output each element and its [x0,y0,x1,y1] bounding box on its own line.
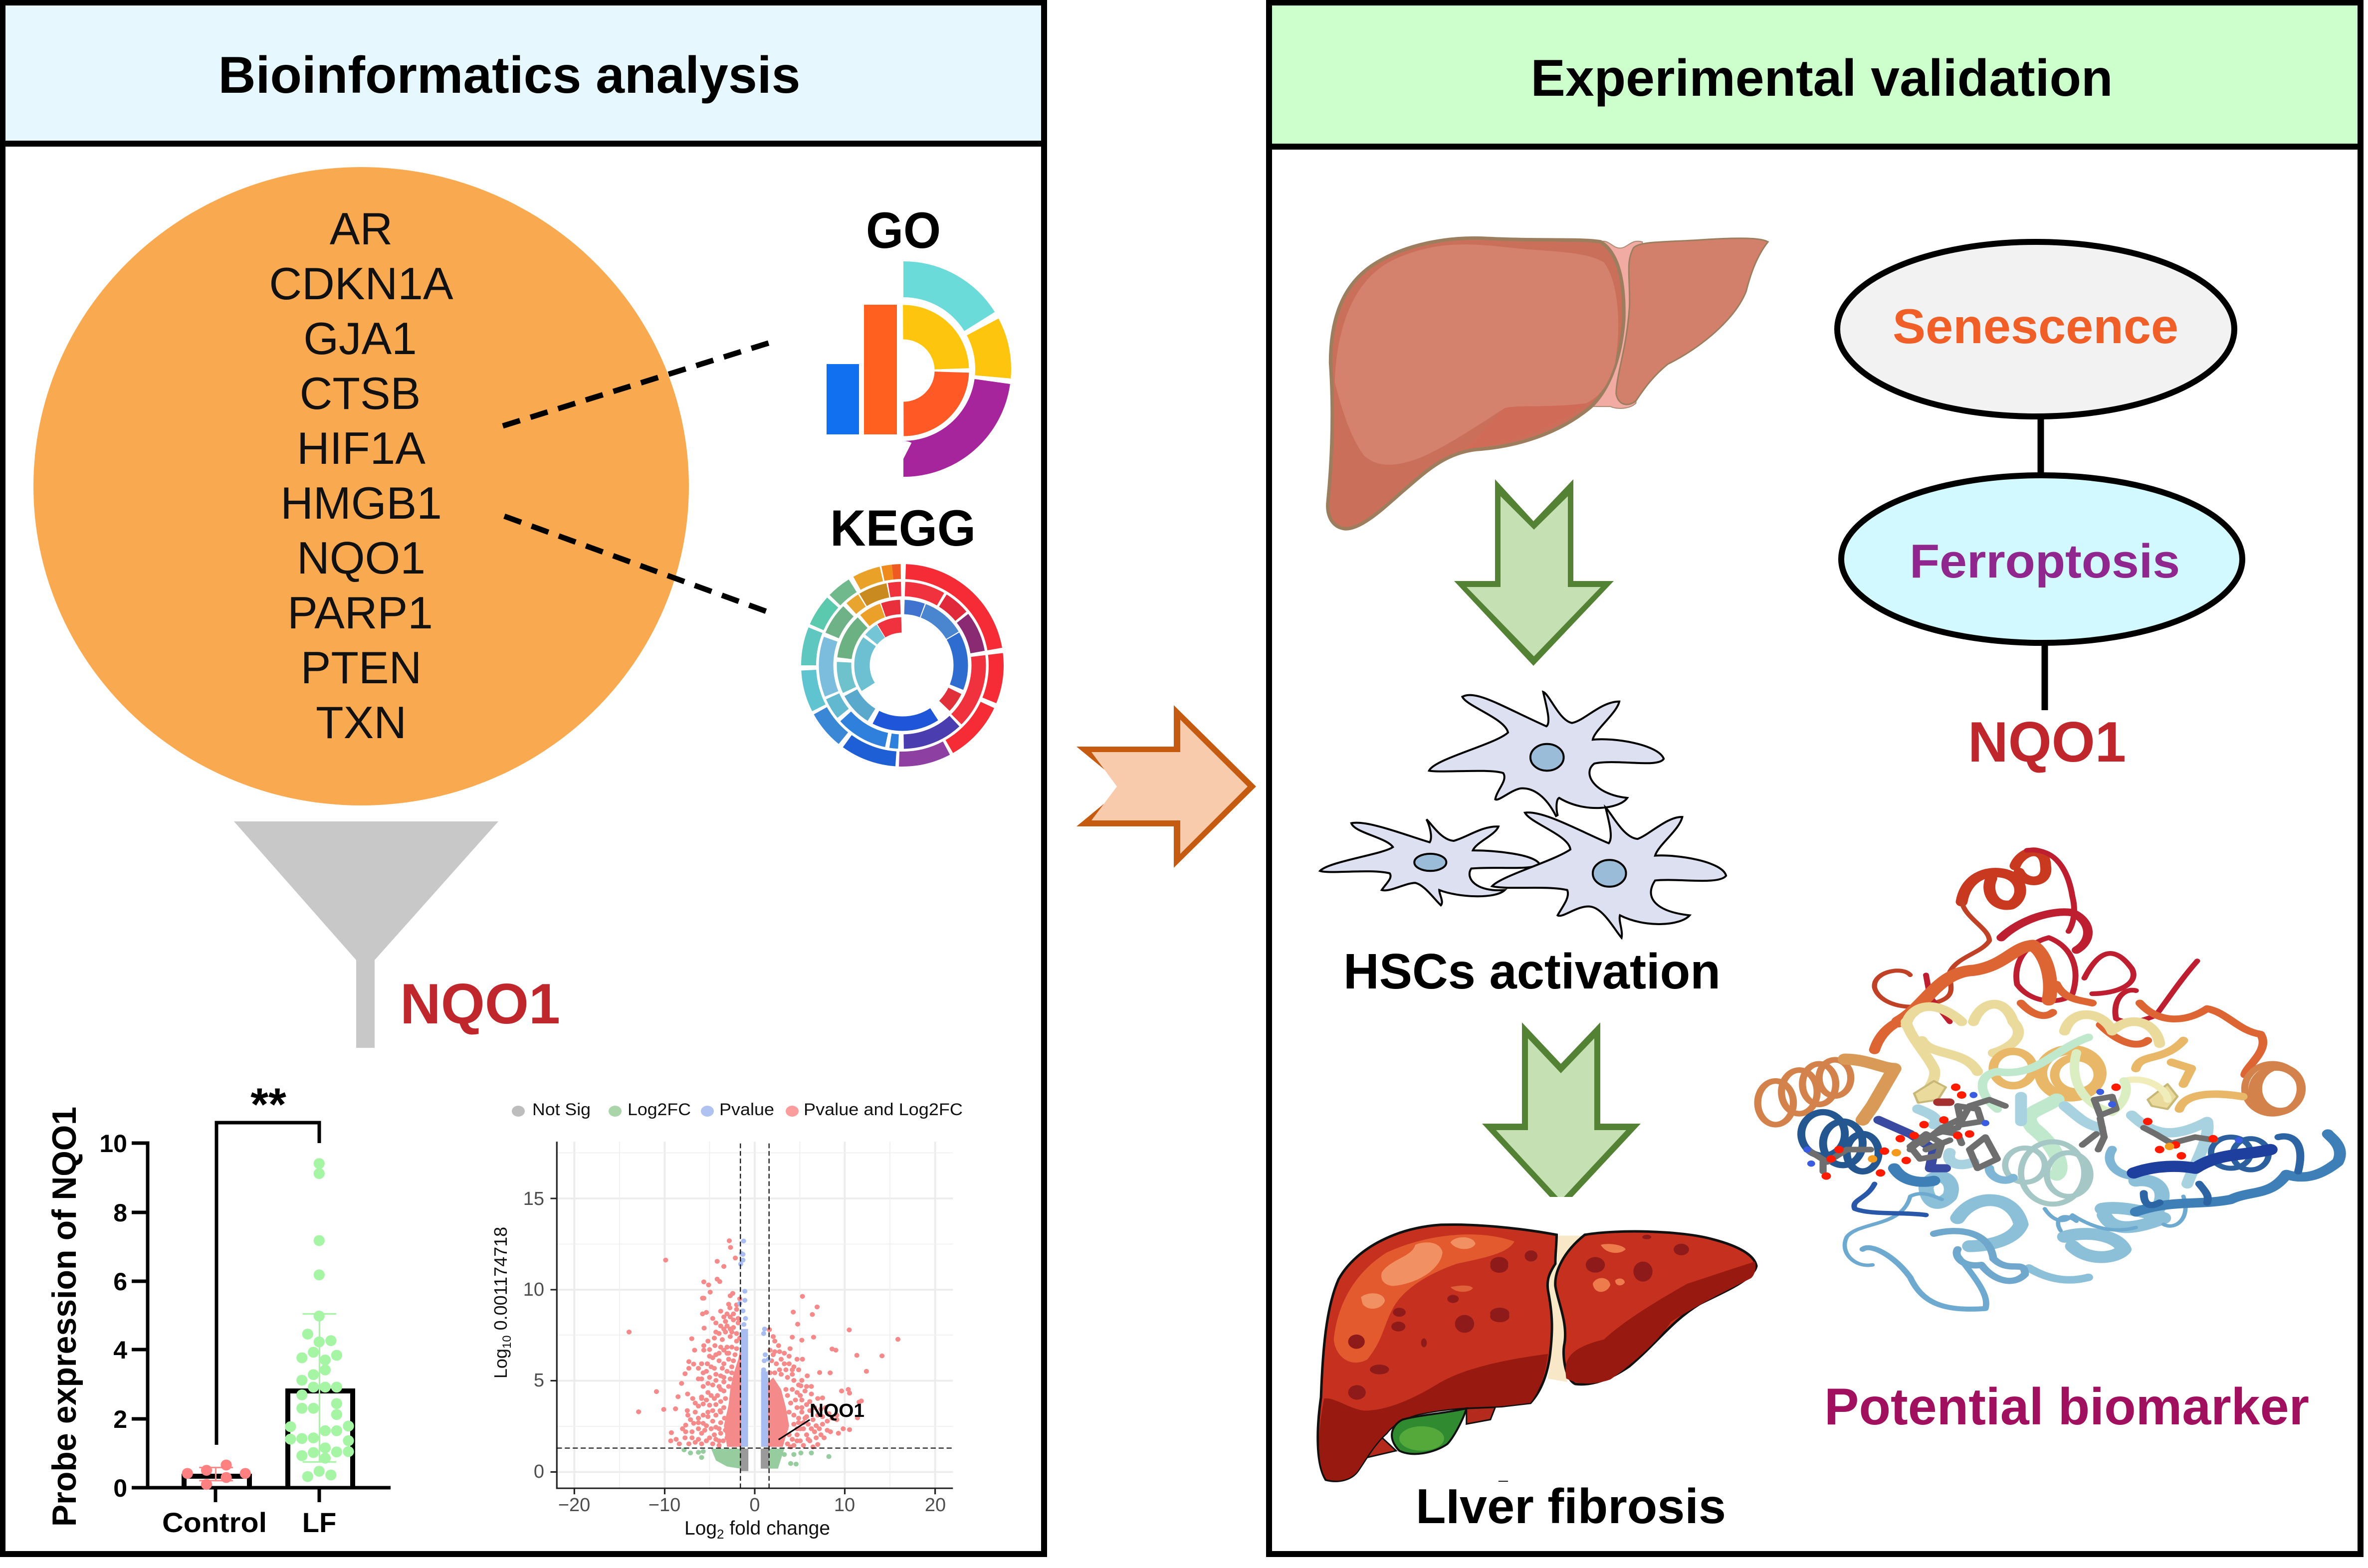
icon: healthy liver [1328,238,1768,529]
volcano plot [490,1100,963,1542]
x-axis tick labels: 0 [749,1495,760,1516]
icon: NQO1 protein structure [1758,850,2340,1309]
significance bracket [216,1123,319,1445]
arrow: HSCs to fibrosis [1482,1022,1641,1197]
y-axis title: Probe expression of NQO1 [45,1107,83,1527]
legend: Pvalue and Log2FC [804,1100,963,1119]
x-axis labels: Control [162,1507,267,1538]
icon: KEGG ring chart [809,572,996,759]
y-axis tick labels: 8 [113,1199,127,1227]
label: Potential biomarker: Potential biomarker [1824,1378,2309,1436]
gene list: CTSB [300,369,421,419]
panel frame: experimental [1269,2,2361,1554]
y-axis tick labels: 15 [523,1188,544,1209]
x-axis labels: LF [302,1507,336,1538]
ferroptosis ellipse [1841,475,2242,643]
funnel output label: NQO1: NQO1 [400,973,560,1036]
gene list: HIF1A [297,423,426,474]
panel header: bioinformatics [2,2,1044,144]
y-axis title: 10 [500,1335,514,1349]
panel: experimental validation [1269,2,2361,1554]
gene list: PTEN [301,643,422,693]
y-axis tick labels: 4 [113,1336,127,1364]
KEGG label: KEGG [830,500,976,557]
bar chart: probe expression of NQO1 [45,1079,391,1538]
x-axis tick labels: −20 [558,1495,590,1516]
x-axis tick labels: −10 [648,1495,680,1516]
gene list: GJA1 [303,314,417,364]
x-axis labels [162,1507,336,1538]
y-axis tick labels: 6 [113,1268,127,1296]
y-axis tick labels [99,1130,127,1502]
y-axis tick labels: 0 [534,1461,544,1482]
arrow: analysis to validation [1076,705,1256,868]
legend: Pvalue [719,1100,774,1119]
gene list [269,204,453,748]
gene list: PARP1 [287,588,433,638]
label: Senescence: Senescence [1893,299,2178,354]
legend: Log2FC [628,1100,691,1119]
panel frame: bioinformatics [2,2,1044,1554]
gene list: CDKN1A [269,259,453,309]
senescence ellipse [1837,242,2234,416]
label: NQO1: NQO1 [1968,711,2126,774]
gene list: AR [330,204,393,254]
x-axis title: 2 [717,1527,724,1542]
legend: Not Sig [532,1100,591,1119]
y-axis tick labels: 2 [113,1405,127,1433]
y-axis tick labels: 0 [113,1474,127,1502]
gene list: NQO1 [297,533,426,584]
arrow: liver to HSCs [1454,479,1614,666]
x-axis tick labels: 20 [925,1495,946,1516]
y-axis tick labels: 10 [99,1130,127,1158]
gene circle [33,167,689,805]
y-axis tick labels: 5 [534,1370,544,1391]
funnel [234,821,498,1048]
heading: Bioinformatics analysis: Bioinformatics analysis [218,46,800,104]
point label: NQO1: NQO1 [810,1400,864,1421]
control error bar and points [188,1465,245,1484]
LF error bar and points [290,1164,348,1477]
gene list: HMGB1 [280,478,442,529]
icon: hepatic stellate cells [1320,692,1726,938]
panel header: experimental [1269,2,2361,147]
label: HSCs activation: HSCs activation [1343,944,1721,999]
x-axis tick labels: 10 [834,1495,855,1516]
x-axis tick labels [558,1495,946,1516]
connector: ferroptosis to NQO1 [2041,643,2048,710]
y-axis title: Log [490,1349,511,1378]
plot area and points [551,1142,953,1494]
panel: bioinformatics analysis [2,2,1044,1554]
y-axis title: 0.001174718 [490,1227,511,1335]
connector: senescence to ferroptosis [2037,416,2044,476]
label: Ferroptosis: Ferroptosis [1910,535,2180,588]
significance stars: ** [250,1079,286,1130]
x-axis title: Log [684,1518,717,1539]
label: LIver fibrosis: LIver fibrosis [1416,1479,1726,1534]
icon: GO chart [814,279,993,482]
icon: fibrotic liver [1318,1224,1756,1482]
gene list: TXN [316,698,407,748]
GO label: GO [866,202,941,259]
x-axis title: fold change [724,1518,830,1539]
heading: Experimental validation: Experimental validation [1530,49,2113,107]
y-axis tick labels [523,1188,544,1482]
axes and ticks [132,1143,391,1502]
legend [512,1100,963,1119]
dashed connectors [503,341,775,614]
bars [184,1391,353,1488]
y-axis tick labels: 10 [523,1279,544,1300]
